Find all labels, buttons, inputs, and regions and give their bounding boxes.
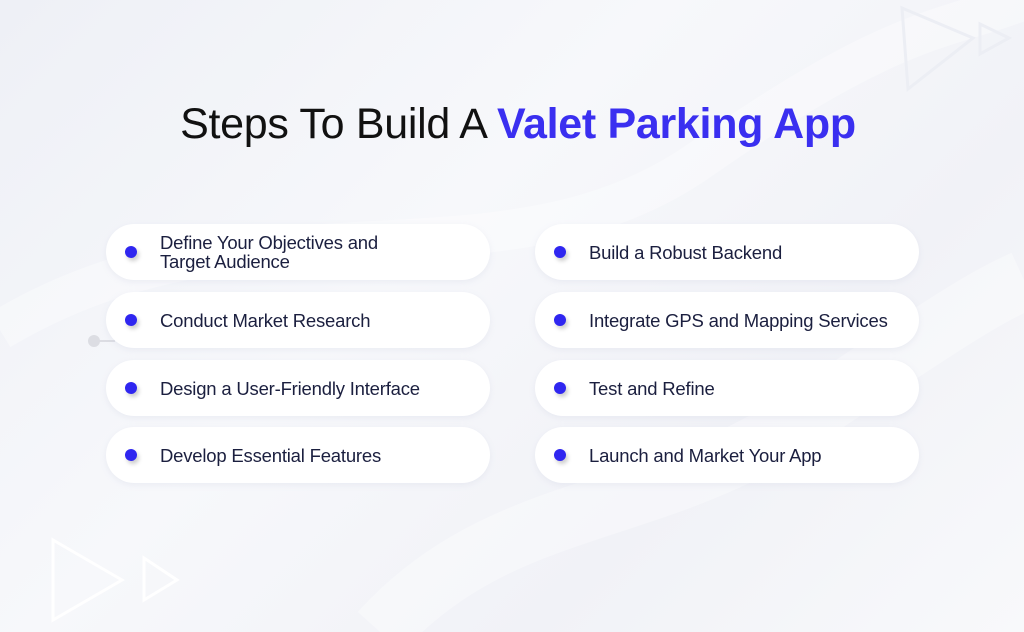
step 1: Target Audience <box>160 251 290 272</box>
step 1: Define Your Objectives and <box>160 232 378 253</box>
step 5 <box>535 224 919 280</box>
step 3 <box>106 360 490 416</box>
step 4 <box>106 427 490 483</box>
step 7: Test and Refine <box>589 378 715 398</box>
step 2 <box>106 292 490 348</box>
step 6: Integrate GPS and Mapping Services <box>589 310 888 330</box>
step 3: Design a User-Friendly Interface <box>160 378 420 398</box>
title: Steps To Build A Valet Parking App <box>180 100 856 148</box>
step 6 <box>535 292 919 348</box>
step 1 <box>106 224 490 280</box>
step 4: Develop Essential Features <box>160 444 381 466</box>
step 8 <box>535 427 919 483</box>
step 5: Build a Robust Backend <box>589 242 782 262</box>
step 2: Conduct Market Research <box>160 310 370 330</box>
step 8: Launch and Market Your App <box>589 444 821 466</box>
step 7 <box>535 360 919 416</box>
